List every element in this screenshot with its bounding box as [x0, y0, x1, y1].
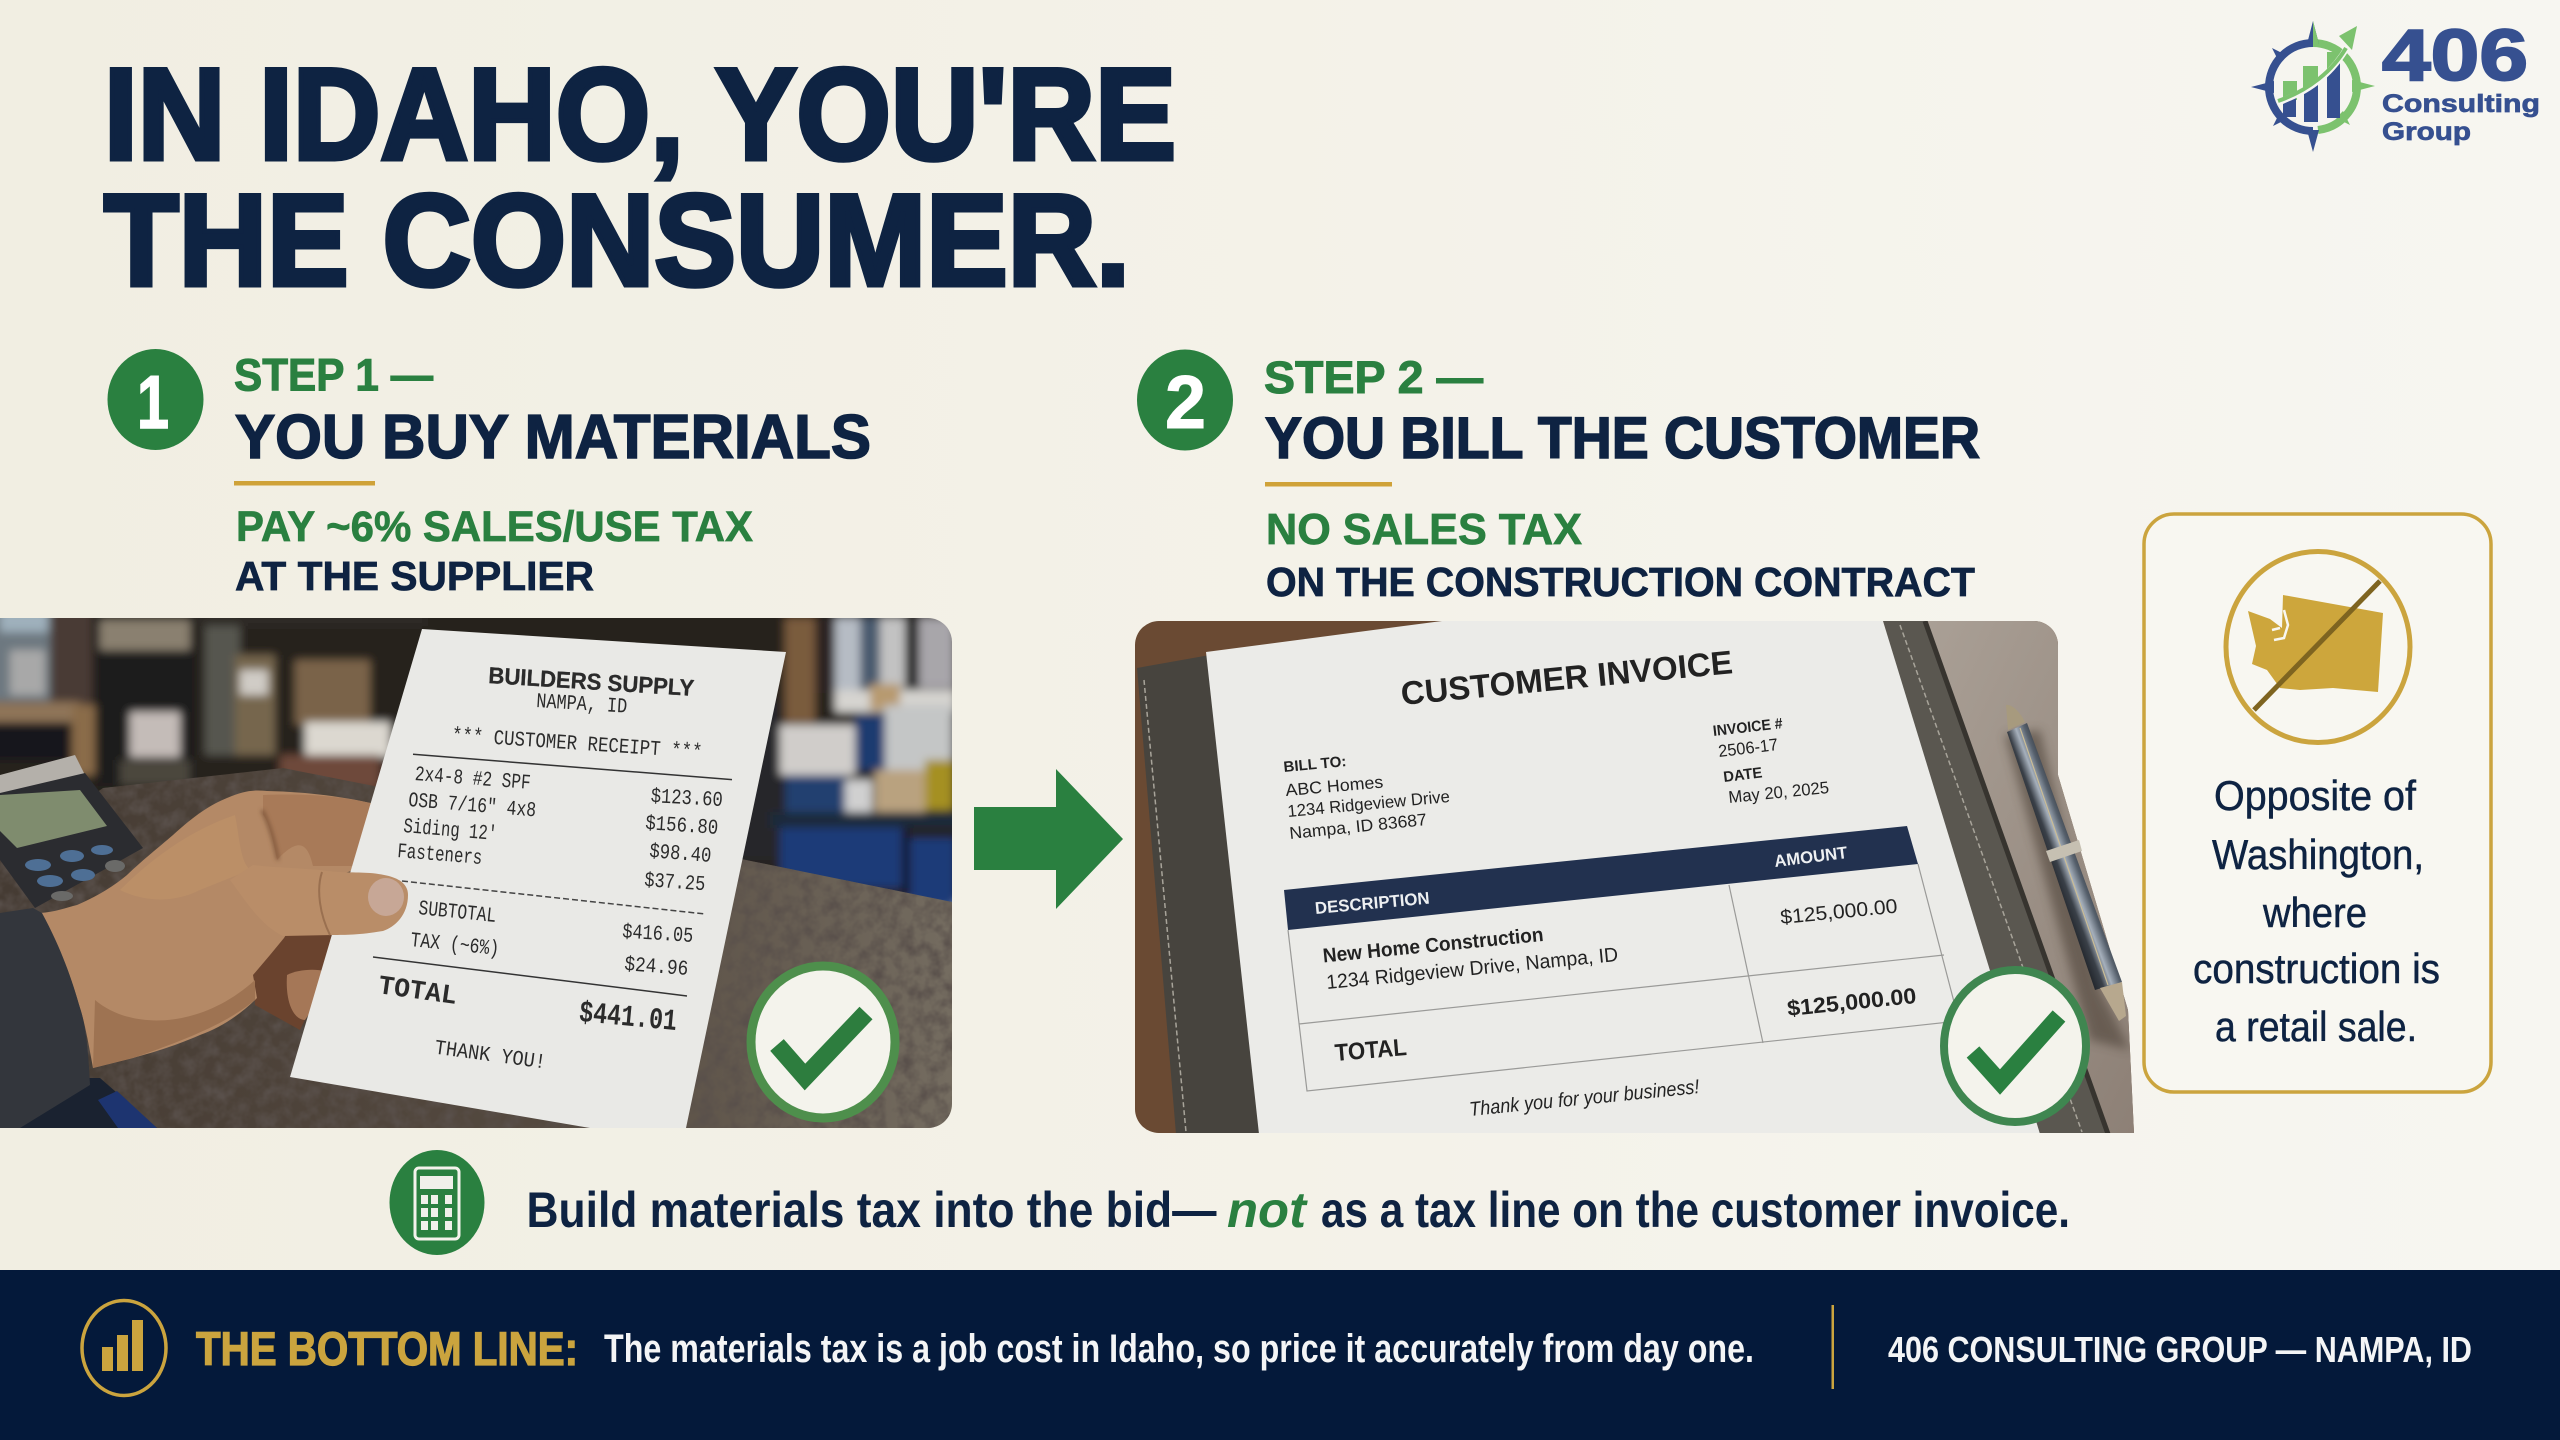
pen barrel [2007, 723, 2122, 990]
panel: step 2 heading [1137, 350, 1980, 605]
receipt text: NAMPA, ID [536, 691, 628, 720]
invoice table: TOTAL [1334, 1034, 1408, 1067]
invoice table [1284, 826, 1959, 1121]
pen top nib [2006, 705, 2025, 730]
callout text [2193, 772, 2440, 1050]
logo wordmark: Consulting [2382, 90, 2540, 118]
callout text: Opposite of [2214, 772, 2416, 819]
arrow: step 1 to step 2 [974, 769, 1123, 909]
icon: bar chart in circle [82, 1300, 166, 1396]
invoice text: BILL TO: [1283, 753, 1347, 776]
invoice table: $125,000.00 [1779, 896, 1898, 929]
footer band [0, 1270, 2560, 1440]
panel: step 1 heading [108, 349, 871, 599]
step 1 title: YOU BUY MATERIALS [235, 403, 871, 472]
check badge [751, 966, 895, 1118]
step 2 number badge: 2 [1165, 360, 1206, 444]
receipt text: Fasteners [396, 841, 483, 871]
invoice text: DATE [1722, 764, 1763, 786]
pen shadow [2005, 730, 2130, 1050]
invoice text [1283, 643, 1959, 1121]
invoice text: INVOICE # [1712, 715, 1784, 740]
granite counter [0, 760, 960, 1135]
thumb over receipt [285, 872, 408, 936]
receipt paper [290, 629, 786, 1128]
invoice table: 1234 Ridgeview Drive, Nampa, ID [1325, 944, 1619, 994]
tip line [390, 1150, 2070, 1255]
callout: opposite of Washington [2144, 514, 2491, 1092]
pen ring [2046, 840, 2082, 862]
tip text: not [1227, 1182, 1308, 1238]
pen bottom nib [2100, 982, 2126, 1021]
receipt text: $37.25 [644, 870, 706, 897]
step 1 supplier line: AT THE SUPPLIER [235, 553, 594, 599]
leather folder [1137, 621, 2108, 1134]
receipt text: $24.96 [623, 954, 689, 982]
step 2 no tax line: NO SALES TAX [1266, 505, 1582, 554]
logo: 406 Consulting Group [2251, 16, 2540, 152]
step 1 label: STEP 1 — [234, 350, 433, 400]
callout text: Washington, [2212, 831, 2424, 878]
receipt text: TAX (~6%) [409, 930, 500, 962]
invoice text: ABC Homes [1285, 773, 1384, 800]
invoice table: $125,000.00 [1786, 983, 1917, 1021]
icon: calculator [390, 1150, 484, 1255]
step 2 contract line: ON THE CONSTRUCTION CONTRACT [1266, 559, 1975, 605]
invoice table: New Home Construction [1322, 924, 1544, 967]
pen [2006, 705, 2126, 1021]
panel: receipt photo [0, 600, 970, 1135]
tip text: as a tax line on the customer invoice. [1321, 1182, 2070, 1238]
receipt text: $156.80 [645, 813, 719, 841]
step 1 number badge: 1 [137, 360, 169, 444]
receipt text: OSB 7/16" 4x8 [407, 790, 537, 823]
receipt text: BUILDERS SUPPLY [488, 662, 695, 701]
callout text: construction is [2193, 945, 2440, 992]
step 2 number badge [1137, 350, 1233, 450]
receipt text: SUBTOTAL [417, 898, 497, 929]
title: THE CONSUMER. [104, 167, 1130, 313]
invoice table: AMOUNT [1773, 843, 1849, 871]
index finger shading [263, 794, 375, 866]
step 2 label: STEP 2 — [1264, 352, 1483, 403]
step 1 tax line: PAY ~6% SALES/USE TAX [236, 503, 753, 551]
title: IN IDAHO, YOU'RE [104, 41, 1176, 187]
back of hand [40, 791, 375, 1068]
panel: invoice photo [1135, 621, 2145, 1134]
blurred store background [0, 600, 970, 908]
table surface [1135, 621, 2145, 1134]
logo wordmark [2382, 16, 2540, 146]
logo mark: compass with chart [2251, 21, 2375, 152]
receipt text: *** CUSTOMER RECEIPT *** [451, 725, 703, 765]
logo wordmark: 406 [2382, 16, 2528, 96]
invoice text: 1234 Ridgeview Drive [1287, 787, 1451, 821]
bottom line message: The materials tax is a job cost in Idaho, so price it accurately from day one. [604, 1327, 1754, 1371]
step 1 number badge [108, 349, 204, 450]
tip text: Build materials tax into the bid— [526, 1182, 1216, 1238]
lower fingers behind receipt [253, 935, 332, 1030]
receipt text: 2x4-8 #2 SPF [414, 764, 531, 796]
invoice text: 2506-17 [1717, 735, 1779, 761]
invoice table: DESCRIPTION [1314, 889, 1430, 918]
receipt text: $123.60 [650, 786, 723, 813]
receipt text: $441.01 [578, 997, 678, 1040]
invoice check badge [1944, 970, 2086, 1122]
sleeve [0, 908, 90, 1128]
invoice text: May 20, 2025 [1728, 778, 1830, 807]
invoice paper [1206, 621, 2040, 1134]
step 2 title: YOU BILL THE CUSTOMER [1265, 406, 1980, 471]
receipt text: $98.40 [648, 841, 712, 869]
invoice table: Thank you for your business! [1468, 1076, 1701, 1121]
receipt text: Siding 12' [402, 816, 498, 847]
logo wordmark: Group [2382, 118, 2471, 146]
invoice text: Nampa, ID 83687 [1288, 810, 1428, 843]
receipt text: TOTAL [376, 972, 459, 1013]
bottom line label: THE BOTTOM LINE: [196, 1322, 578, 1375]
title [104, 41, 1176, 313]
callout text: a retail sale. [2215, 1003, 2417, 1050]
card terminal [0, 755, 143, 908]
tip text [526, 1182, 2070, 1238]
receipt text: THANK YOU! [433, 1038, 547, 1075]
hand [40, 791, 375, 1068]
receipt text: $416.05 [622, 922, 694, 949]
callout text: where [2262, 889, 2367, 936]
icon: Washington state prohibited [2226, 552, 2410, 742]
invoice text: CUSTOMER INVOICE [1399, 643, 1734, 712]
firm name: 406 CONSULTING GROUP — NAMPA, ID [1888, 1329, 2472, 1370]
receipt text [373, 662, 732, 1075]
